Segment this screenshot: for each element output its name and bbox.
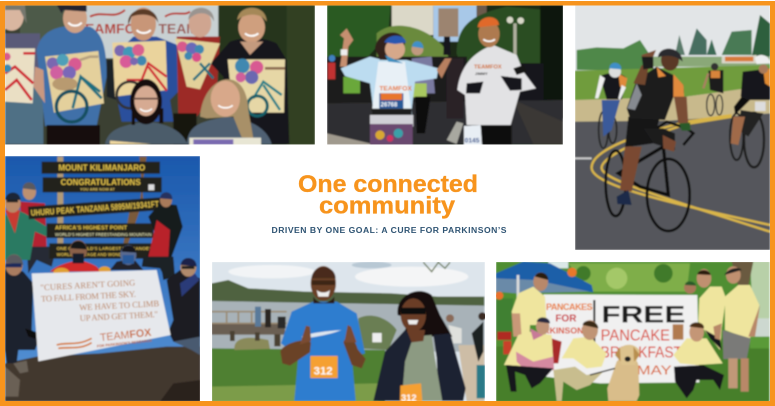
sub: volunteers crouching — [504, 317, 724, 401]
sub: background people — [446, 312, 486, 398]
sub: painting behind — [175, 38, 220, 89]
sub: Free Pancake Breakfast banner: PANCAKES — [546, 302, 593, 312]
sub: tree line — [577, 15, 770, 70]
sub: runner two: JIMMY — [475, 71, 488, 76]
sub: Free Pancake Breakfast banner — [543, 294, 699, 383]
sub: sign volcano: ONE OF WORLD'S LARGEST VOLCANOES — [57, 246, 152, 251]
sub: runner one: 26768 — [381, 103, 398, 109]
sub: runner one: TEAMFOX — [379, 86, 412, 93]
sub: painting right — [228, 59, 285, 116]
photo: painting class group: EAMFOX — [85, 20, 145, 36]
sub: Free Pancake Breakfast banner: FREE — [601, 301, 685, 328]
title: One connected community: community — [319, 192, 455, 220]
sub: sign volcano — [49, 243, 153, 259]
sub: runner two: 0145 — [465, 138, 480, 145]
sub: man in blue: 312 — [314, 365, 333, 377]
photo: pancake breakfast volunteers — [495, 262, 769, 402]
sub: sign highest point: AFRICA'S HIGHEST POINT — [55, 226, 128, 232]
sub: sign Uhuru Peak — [28, 197, 162, 219]
sub: cyclist back — [703, 63, 723, 116]
photo: fun run participants — [212, 262, 486, 403]
sub: woman in jacket — [373, 291, 466, 403]
sub: sign volcano: WORLD HERITAGE AND WONDER — [57, 252, 128, 257]
photo: painting class group — [0, 3, 315, 145]
sub: pier — [212, 307, 287, 346]
sub: sign Mount Kilimanjaro: MOUNT KILIMANJARO — [58, 164, 145, 173]
sub: Free Pancake Breakfast banner: PANCAKE — [601, 327, 670, 344]
title: One connected community — [298, 171, 478, 220]
sub: painting far left — [3, 48, 35, 103]
sub: Team Fox banner: TO FALL FROM THE SKY. — [41, 289, 136, 304]
sub: runner one — [340, 28, 452, 145]
sub: painting bicycle red — [112, 41, 167, 108]
sub: sign Congratulations: YOU ARE NOW AT — [80, 186, 115, 191]
sub: Team Fox banner: TEAMFOX — [99, 327, 153, 344]
sub: sign Congratulations — [43, 177, 162, 192]
sub: climber standing right — [142, 192, 183, 280]
sub: road lines — [592, 115, 770, 232]
sub: sign Uhuru Peak: UHURU PEAK TANZANIA 5895M/19341FT — [30, 199, 160, 218]
sub: shoreline — [212, 280, 484, 307]
sub: Free Pancake Breakfast banner: RKINSON — [543, 325, 583, 335]
sub: cyclist left — [595, 63, 627, 148]
sub: volunteers standing — [512, 266, 760, 392]
sub: sign highest point — [47, 223, 153, 238]
sub: painting bicycle teal — [45, 51, 104, 122]
sub: Team Fox banner: UP AND GET THEM." — [79, 309, 158, 323]
sub: ground — [5, 347, 200, 401]
photo: Kilimanjaro summit climbers — [5, 156, 200, 401]
sub: Team Fox banner: WE HAVE TO CLIMB — [79, 298, 160, 312]
sub: Free Pancake Breakfast banner: MAY — [637, 362, 672, 377]
sub: climbers standing left — [5, 182, 57, 273]
sub: cyclist right — [730, 55, 770, 167]
sub: blue canopy tent — [495, 262, 593, 300]
photo: painting class group: TEAM — [158, 20, 198, 36]
sub: man in blue — [280, 266, 366, 401]
sub: climbers kneeling — [5, 240, 200, 373]
photo: marathon runners — [327, 5, 563, 145]
sub: sign Congratulations: CONGRATULATIONS — [61, 178, 141, 187]
sub: sign Mount Kilimanjaro — [42, 162, 160, 174]
photo: cycling event — [575, 5, 770, 250]
sub: main cyclist — [606, 49, 693, 231]
sub: Free Pancake Breakfast banner: FOR — [555, 314, 576, 325]
sub: runner two: TEAMFOX — [474, 64, 502, 70]
title: One connected community: One connected — [298, 171, 478, 198]
subtitle: DRIVEN BY ONE GOAL: A CURE FOR PARKINSON’S — [272, 225, 507, 235]
sub: runner behind — [411, 41, 435, 133]
sub: Free Pancake Breakfast banner: BREAKFAST — [601, 345, 683, 362]
sub: bottom paintings — [110, 138, 261, 145]
sub: Team Fox banner — [32, 270, 171, 361]
sub: golden retriever — [590, 345, 640, 401]
sub: Team Fox banner: FOR PARKINSON'S RESEARCH — [97, 339, 152, 348]
sub: Team Fox banner: "CURES AREN'T GOING — [40, 277, 136, 292]
sub: sign highest point: WORLD'S HIGHEST FREESTANDING MOUNTAIN — [55, 232, 152, 237]
sub: runner two — [457, 17, 536, 145]
sub: woman in jacket: 312 — [401, 393, 417, 403]
